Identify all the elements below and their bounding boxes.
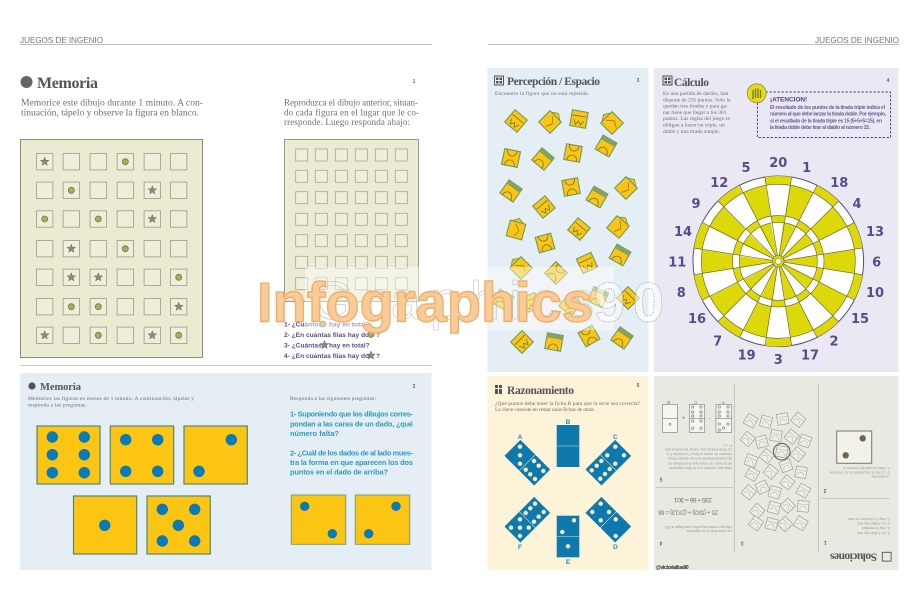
- question 2: tra la forma en que aparecen los dos: [290, 458, 413, 467]
- panel: Soluciones (upside down): [654, 376, 898, 570]
- icon: check box: [882, 552, 891, 561]
- instructions right: Reproduzca el dibujo anterior, situan-: [284, 98, 418, 108]
- icon: grid: [494, 76, 504, 85]
- answer 5 labels: B: [667, 400, 670, 405]
- page number 4: 4: [887, 78, 890, 84]
- domino C: [585, 434, 631, 486]
- dartboard numbers: 7: [713, 334, 722, 350]
- domino A: A: [518, 434, 523, 441]
- problem text: doble y una tirada simple.: [663, 129, 721, 135]
- callout text: El resultado de los puntos de la tirada triple indica el: [770, 105, 886, 111]
- answer 2: 2: [823, 487, 826, 493]
- page number 5: 5: [637, 383, 640, 389]
- instructions left: Memorice este dibujo durante 1 minuto. A con-: [21, 98, 203, 108]
- question 1: número falta?: [290, 429, 339, 438]
- dartboard numbers: 10: [866, 286, 884, 301]
- answer 5 labels: +: [682, 416, 686, 422]
- domino F: F: [518, 544, 522, 551]
- figure tiles: [492, 108, 640, 353]
- domino D: D: [613, 544, 618, 551]
- answer die: [837, 431, 872, 463]
- answer 5: 5: [659, 476, 662, 482]
- answer 2: 2- La de la izquierda es la correcta: [830, 470, 890, 474]
- answer 2: La derecha.: [871, 474, 890, 478]
- memory questions: 2- ¿En cuántas filas hay dos: [284, 332, 373, 339]
- watermark: [257, 267, 664, 334]
- dartboard numbers: 11: [668, 255, 686, 270]
- panel: Percepción / Espacio: [488, 68, 648, 372]
- answer 3: tiles: 3: [741, 540, 744, 546]
- problem text: dispone de 235 puntos. Solo le: [663, 97, 731, 103]
- dartboard numbers: 13: [866, 225, 884, 240]
- instructions right: rresponde. Luego responda abajo:: [284, 117, 410, 127]
- problem text: nar tiene que llegar a los 301: [663, 110, 727, 116]
- dartboard numbers: 6: [872, 255, 881, 270]
- icon: domino grid: [495, 385, 502, 394]
- memory questions: 1- ¿Cuántos: [284, 322, 322, 328]
- callout: atención: [747, 84, 890, 138]
- problem text: ¿Qué puntos debe tener la ficha B para que la serie sea correcta?: [495, 400, 641, 407]
- panel: Razonamiento: [488, 376, 648, 570]
- problem text: quedan tres tiradas y para ga-: [663, 104, 728, 110]
- question 2: puntos en el dado de arriba?: [290, 468, 388, 477]
- answer 4: [657, 496, 732, 546]
- watermark main text: Infographics: [257, 270, 593, 334]
- heading: Razonamiento: [507, 385, 574, 397]
- answer 1: 1- Hay 10 círculos en total: [848, 517, 890, 521]
- panel: Cálculo: [654, 68, 898, 372]
- memory questions: [284, 321, 380, 360]
- answer 5: de la serie, de modo que el resultado de: [668, 461, 732, 465]
- die: one: [74, 496, 137, 554]
- icon: hand: [747, 84, 766, 103]
- icon: grid: [663, 76, 672, 85]
- domino F: [504, 497, 550, 551]
- dartboard numbers: 15: [851, 312, 869, 327]
- dartboard numbers: 12: [710, 176, 728, 191]
- question 1: pondan a las caras de un dado, ¿qué: [290, 419, 413, 428]
- answer 1: [824, 517, 890, 545]
- page number 1: 1: [413, 79, 416, 85]
- answer die B: [355, 495, 410, 544]
- question 1: 1- Suponiendo que los dibujos corres-: [290, 410, 414, 419]
- answer 5: La ficha B tiene que sumar los puntos que: [665, 448, 732, 452]
- dartboard numbers: 9: [691, 197, 701, 212]
- answer 4: Hay que restar los puntos para llegar a 301.: [664, 525, 732, 529]
- answer 5: así sucesivamente con las demás fichas: [667, 457, 732, 461]
- page header right: JUEGOS DE INGENIO: [815, 36, 899, 45]
- instructions left: tinuación, tápelo y observe la figura en blanco.: [21, 107, 199, 118]
- problem text: La clave consiste en restar unas fichas de otras.: [495, 406, 596, 413]
- domino A: [504, 434, 550, 486]
- answer 5: resultan de restar la ficha F a la ficha C y: [666, 452, 732, 456]
- dartboard numbers: 4: [852, 197, 862, 212]
- dartboard numbers: 16: [688, 312, 706, 327]
- answer 1: 1: [824, 539, 827, 545]
- answer 5 labels: C: [693, 400, 697, 405]
- dartboard numbers: 5: [741, 161, 751, 176]
- page number 2: 2: [413, 384, 416, 390]
- heading: Percepción / Espacio: [507, 76, 600, 88]
- question 2: 2- ¿Cuál de los dados de al lado mues-: [290, 448, 414, 457]
- dartboard numbers: 14: [674, 225, 692, 240]
- dartboard: [668, 156, 884, 368]
- answer 5: F + C: [723, 443, 732, 447]
- problem text: obligan a hacer un triple, un: [663, 122, 725, 128]
- memory questions: hay en total?: [329, 342, 370, 350]
- die: four: [110, 426, 174, 484]
- answer 5 labels: F: [721, 400, 724, 405]
- watermark number: 90: [594, 270, 664, 334]
- answer 2: [823, 466, 890, 493]
- dartboard numbers: [668, 156, 884, 368]
- dartboard numbers: 1: [802, 161, 811, 176]
- prompt: Responda a las siguientes preguntas:: [290, 396, 376, 402]
- die: six: [37, 426, 100, 484]
- answer 4: 25 + (5X3) + (2X13) = 66: [657, 508, 718, 516]
- problem text: puntos. Las reglas del juego le: [663, 116, 730, 122]
- page number 3: 3: [637, 78, 640, 84]
- memory questions: 4- ¿En cuántas filas hay dos: [284, 353, 373, 360]
- blank memory grid: [284, 140, 418, 302]
- domino E: E: [566, 559, 571, 566]
- dartboard numbers: 18: [830, 176, 848, 191]
- domino C: C: [613, 434, 618, 441]
- answer 4: 4: [659, 540, 662, 546]
- heading: Soluciones: Soluciones: [829, 550, 877, 562]
- answer 1: 3- Hay 9 estrellas: [862, 526, 890, 530]
- callout title: ¡ATENCION!: [770, 96, 807, 103]
- memory questions: hay en total?: [329, 322, 370, 328]
- watermark ghost text: Graphics: [312, 271, 594, 331]
- dartboard numbers: 19: [738, 348, 756, 364]
- dartboard numbers: 3: [774, 353, 783, 368]
- answer 5 labels: [667, 400, 724, 422]
- answer 5 dominoes: [663, 404, 732, 432]
- dartboard numbers: 2: [829, 334, 839, 350]
- dartboard numbers: 17: [801, 348, 819, 364]
- answer 1: 2- En 3 filas hay dos: [857, 522, 890, 526]
- answer 5 labels: -: [709, 416, 711, 422]
- memory questions: ?: [376, 332, 380, 339]
- answer die A: [291, 495, 346, 544]
- answer 1: 4- En 2 filas hay dos: [857, 531, 890, 535]
- panel: Memoria 2: [20, 373, 432, 570]
- heading: Memoria 1: Memoria: [37, 75, 98, 92]
- answer 2: 1- Falta la cara del número 3.: [843, 466, 890, 470]
- handle: @victoria8oa90: [656, 565, 689, 571]
- answer 3: tiles: [740, 412, 812, 546]
- answer 5: cada par coincide con la ficha siguiente.: [668, 466, 732, 470]
- die: five: [147, 496, 210, 554]
- answer 5: [659, 443, 732, 482]
- problem text: En una partida de dardos, han: [663, 91, 729, 97]
- heading: Memoria 2: Memoria: [40, 382, 82, 393]
- instructions: Memorice las figuras en menos de 1 minuto. A continuación, tápelas y: [28, 395, 194, 402]
- dartboard numbers: 8: [677, 286, 686, 301]
- memory questions: ?: [376, 353, 380, 360]
- die: two: [184, 426, 247, 484]
- domino B: [557, 419, 579, 467]
- instructions: responda a las preguntas.: [28, 402, 88, 408]
- memory grid with figures: [20, 140, 202, 358]
- page header left: JUEGOS DE INGENIO: [20, 36, 103, 45]
- instruction: Encuentre la figura que no está repetida.: [495, 90, 589, 97]
- callout text: número al que debe lanzar la tirada doble. Por ejemplo,: [770, 112, 887, 118]
- callout text: si el resultado de la tirada triple es 15 (5+5+5=15), en: [770, 118, 882, 124]
- dartboard numbers: 20: [769, 156, 787, 171]
- memory questions: 3- ¿Cuántas: [284, 342, 322, 350]
- domino B: B: [566, 419, 571, 426]
- domino E: [557, 516, 579, 566]
- domino D: [585, 497, 631, 551]
- instructions right: do cada figura en el lugar que le co-: [284, 107, 419, 117]
- answer 4: La suma final es la siguiente.: [686, 529, 732, 533]
- heading: Cálculo: [674, 77, 709, 89]
- answer 4: 235 + 66 = 301: [674, 496, 712, 503]
- callout text: la tirada doble debe tirar al diablo al número 15.: [770, 125, 871, 131]
- solution ring: [773, 443, 790, 460]
